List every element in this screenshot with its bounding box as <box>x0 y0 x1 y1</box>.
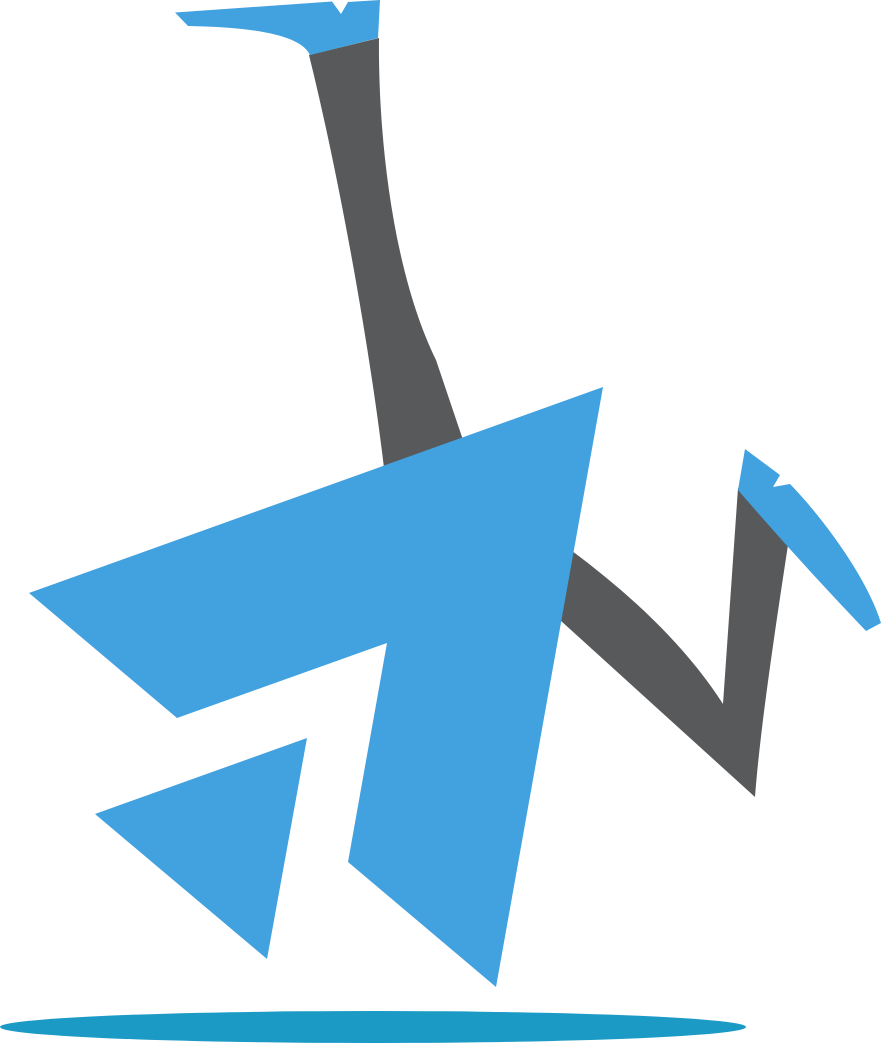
small triangle <box>95 738 307 959</box>
ground shadow <box>0 1011 746 1043</box>
lower leg <box>560 488 788 797</box>
lower shoe <box>738 449 881 631</box>
upper leg <box>309 38 463 468</box>
arrow body <box>29 387 603 987</box>
upper shoe <box>175 0 380 55</box>
